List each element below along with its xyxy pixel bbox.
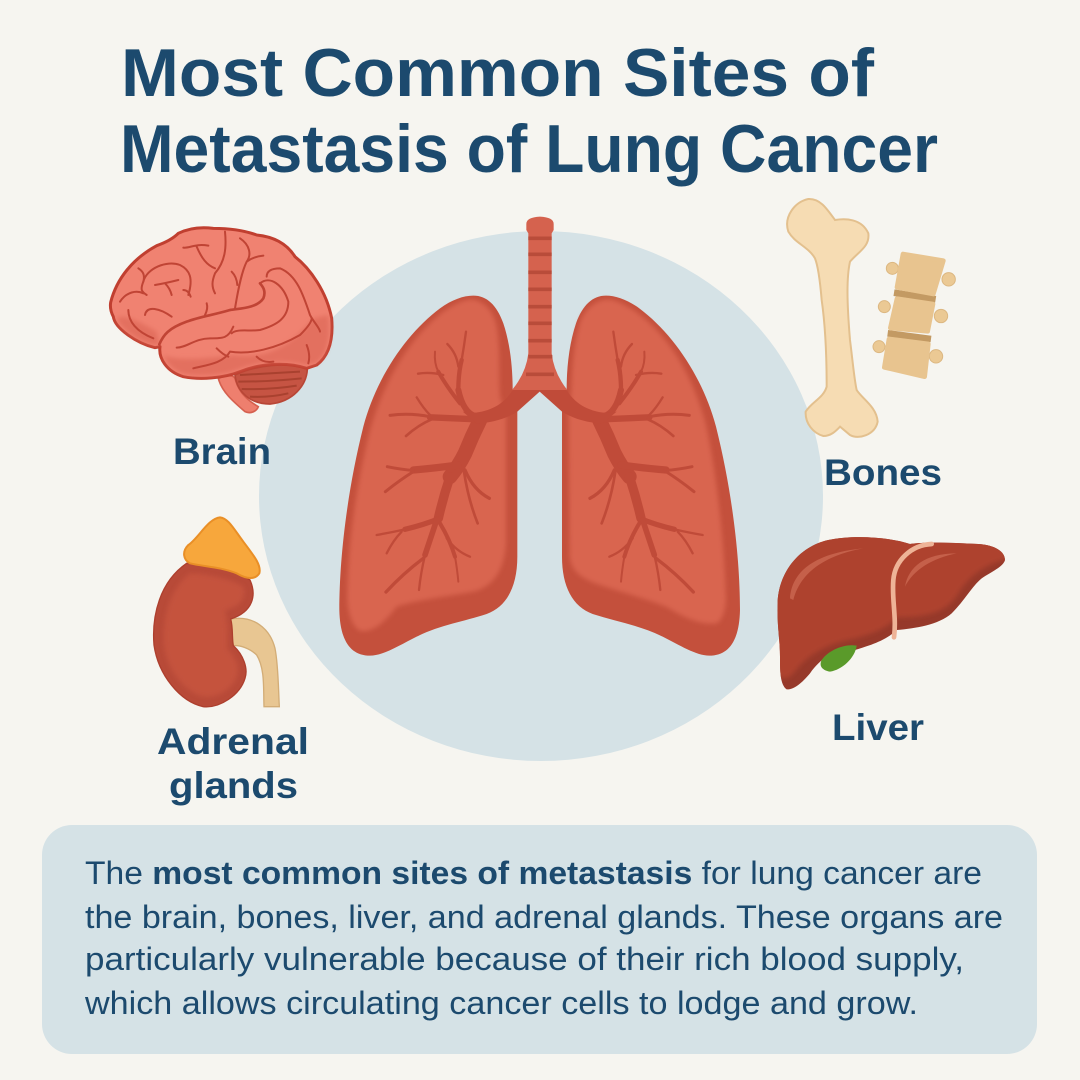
summary text: the brain, bones, liver, and adrenal glands. These organs are [85, 899, 1003, 935]
adrenal gland [184, 517, 260, 578]
summary text: particularly vulnerable because of their rich blood supply, [85, 941, 964, 977]
cerebellum [235, 365, 307, 404]
highlights [790, 548, 957, 600]
left airway tree [377, 332, 489, 592]
label: Brain: Brain [173, 431, 271, 472]
title [120, 35, 938, 187]
icon: bone [787, 199, 878, 437]
summary text [84, 855, 1003, 1021]
discs [888, 293, 936, 339]
summary text: The most common sites of metastasis for lung cancer are [85, 855, 982, 891]
bronchi [463, 390, 617, 423]
cerebrum [110, 228, 332, 378]
title: Most Common Sites of [121, 35, 874, 111]
right airway tree [590, 332, 703, 592]
vertebra bodies [884, 254, 943, 377]
icon: vertebrae [873, 254, 955, 377]
brain stem [218, 376, 258, 413]
icon: lungs and trachea [339, 217, 740, 656]
label: Adrenal glands: Adrenal [157, 721, 309, 762]
icon: kidney and adrenal gland [154, 517, 279, 707]
left lung [339, 296, 517, 656]
title: Metastasis of Lung Cancer [120, 111, 938, 187]
trachea [512, 217, 567, 390]
label: Adrenal glands: glands [169, 765, 298, 806]
label: Bones: Bones [824, 452, 942, 493]
kidney [154, 563, 253, 707]
label: Liver: Liver [832, 707, 924, 748]
icon: liver [772, 532, 1010, 689]
ligament [893, 544, 932, 637]
icon: brain [110, 228, 332, 413]
summary text: which allows circulating cancer cells to lodge and grow. [84, 985, 918, 1021]
right lung [562, 296, 740, 656]
sulci [120, 232, 320, 368]
label: Adrenal glands [157, 721, 309, 806]
gallbladder [821, 645, 857, 672]
ureter [231, 618, 279, 707]
panel: summary [42, 825, 1037, 1054]
background circle [259, 231, 823, 761]
